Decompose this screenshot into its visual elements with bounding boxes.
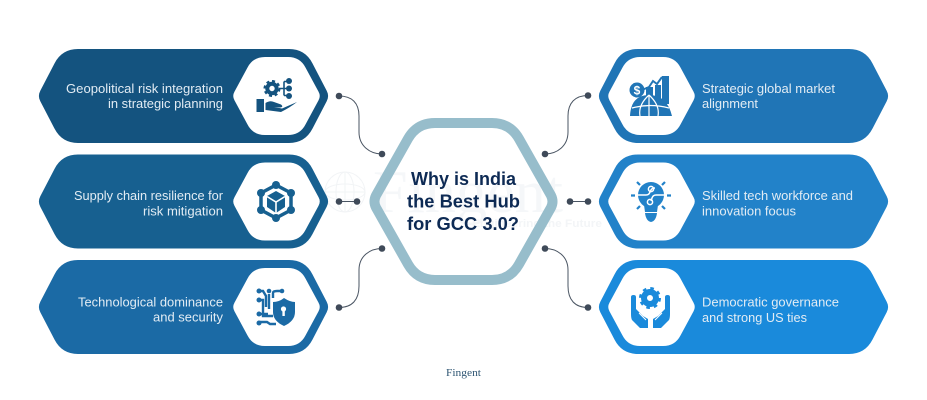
- text: supply chain resilience: Supply chain resilience for: [74, 188, 224, 203]
- text: democratic governance: Democratic governance: [702, 294, 839, 310]
- text: technological dominance: and security: [153, 310, 223, 324]
- panel: geopolitical risk integration: [39, 49, 328, 143]
- icon: hands holding gear: [631, 288, 670, 328]
- icon: gear network and hand: [256, 78, 297, 112]
- text: strategic global market: Strategic global market: [702, 81, 835, 96]
- watermark: [325, 159, 602, 230]
- text: technological dominance: Technological dominance: [78, 294, 223, 310]
- text: geopolitical risk integration: in strategic planning: [108, 96, 223, 111]
- icon: light bulb with circuit: [631, 182, 671, 222]
- central hexagon: [374, 123, 552, 280]
- panel: strategic global market: [599, 49, 888, 143]
- text: geopolitical risk integration: Geopolitical risk integration: [66, 81, 223, 96]
- panel: democratic governance: [599, 260, 888, 354]
- footer brand: Fingent: [446, 368, 481, 379]
- icon: globe, coin and growth bars: $: [634, 84, 641, 98]
- text: skilled tech workforce: innovation focus: [702, 204, 796, 218]
- text: democratic governance: and strong US ties: [702, 310, 807, 325]
- text: skilled tech workforce: Skilled tech workforce and: [702, 188, 853, 203]
- icon: globe, coin and growth bars: [630, 76, 672, 116]
- watermark: Fingent: [373, 159, 563, 225]
- watermark: Engineering the Future: [472, 218, 602, 230]
- text: strategic global market: alignment: [702, 96, 758, 111]
- panel: skilled tech workforce: [599, 154, 888, 248]
- icon: shield and circuit: [256, 288, 295, 326]
- center title: Why is India: [411, 169, 517, 189]
- panel: supply chain resilience: [39, 154, 328, 248]
- text: supply chain resilience: risk mitigation: [143, 204, 223, 218]
- center title: for GCC 3.0?: [407, 214, 519, 234]
- connectors: [336, 92, 591, 311]
- center title: the Best Hub: [407, 192, 520, 212]
- icon: cube in network ring: [257, 181, 295, 222]
- panel: technological dominance: [39, 260, 328, 354]
